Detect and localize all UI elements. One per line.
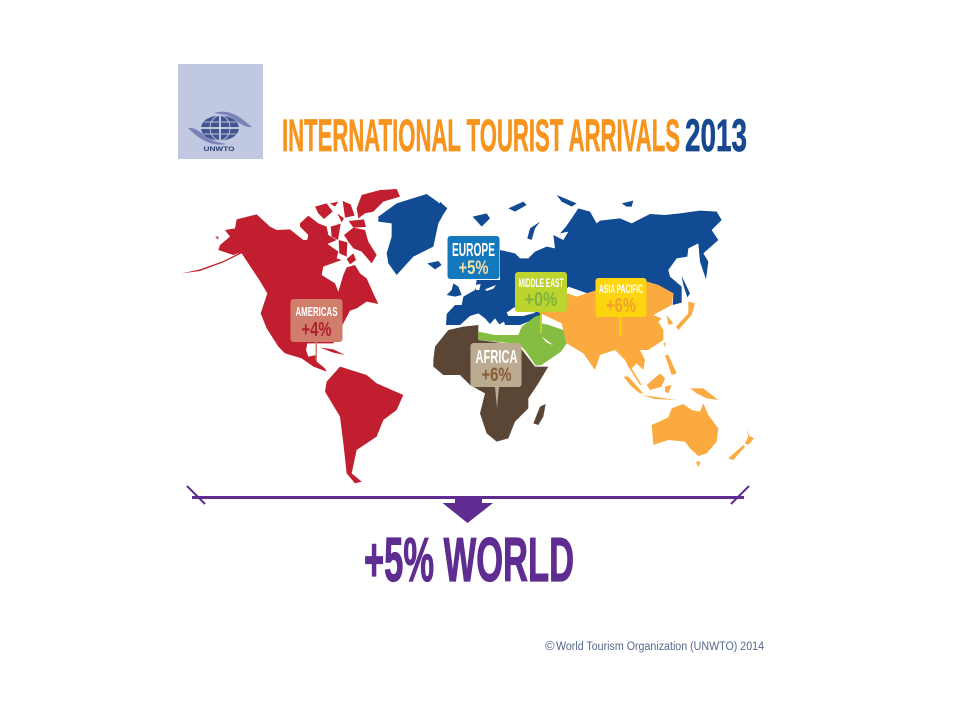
- map: Africa: [433, 325, 548, 442]
- callout: Middle East +0%: +0%: [524, 289, 558, 311]
- callout: Americas +4%: +4%: [302, 319, 332, 341]
- callout: Africa +6%: +6%: [482, 365, 512, 386]
- callout: Europe +5%: [448, 236, 500, 279]
- callout: Asia Pacific +6%: +6%: [606, 295, 636, 317]
- copyright: World Tourism Organization (UNWTO) 2014: [556, 641, 765, 653]
- title: 2013: [685, 110, 747, 161]
- title: [282, 110, 747, 161]
- callout: Africa +6%: [470, 343, 522, 408]
- callout: Middle East +0%: MIDDLE EAST: [518, 276, 564, 290]
- logo: UNWTO: [178, 64, 263, 159]
- logo: UNWTO: UNWTO: [204, 147, 235, 153]
- callout: Europe +5%: +5%: [458, 258, 489, 279]
- map: Americas: [182, 189, 403, 483]
- callout: Middle East +0%: [515, 272, 567, 333]
- callout: Americas +4%: AMERICAS: [296, 304, 338, 319]
- copyright: ©: [545, 638, 555, 653]
- world total: +5% WORLD: [364, 526, 574, 595]
- callout: Americas +4%: [290, 299, 342, 360]
- map: Asia Pacific: [533, 282, 754, 467]
- callout: Africa +6%: AFRICA: [476, 347, 518, 367]
- bracket and arrow: [187, 486, 749, 523]
- callout: Asia Pacific +6%: ASIA PACIFIC: [599, 282, 643, 296]
- callout: Asia Pacific +6%: [596, 278, 646, 336]
- map: Middle East: [478, 315, 567, 366]
- callout: Europe +5%: EUROPE: [452, 240, 495, 260]
- map: inland seas: [475, 284, 536, 316]
- map: Europe and Russia: [378, 194, 722, 325]
